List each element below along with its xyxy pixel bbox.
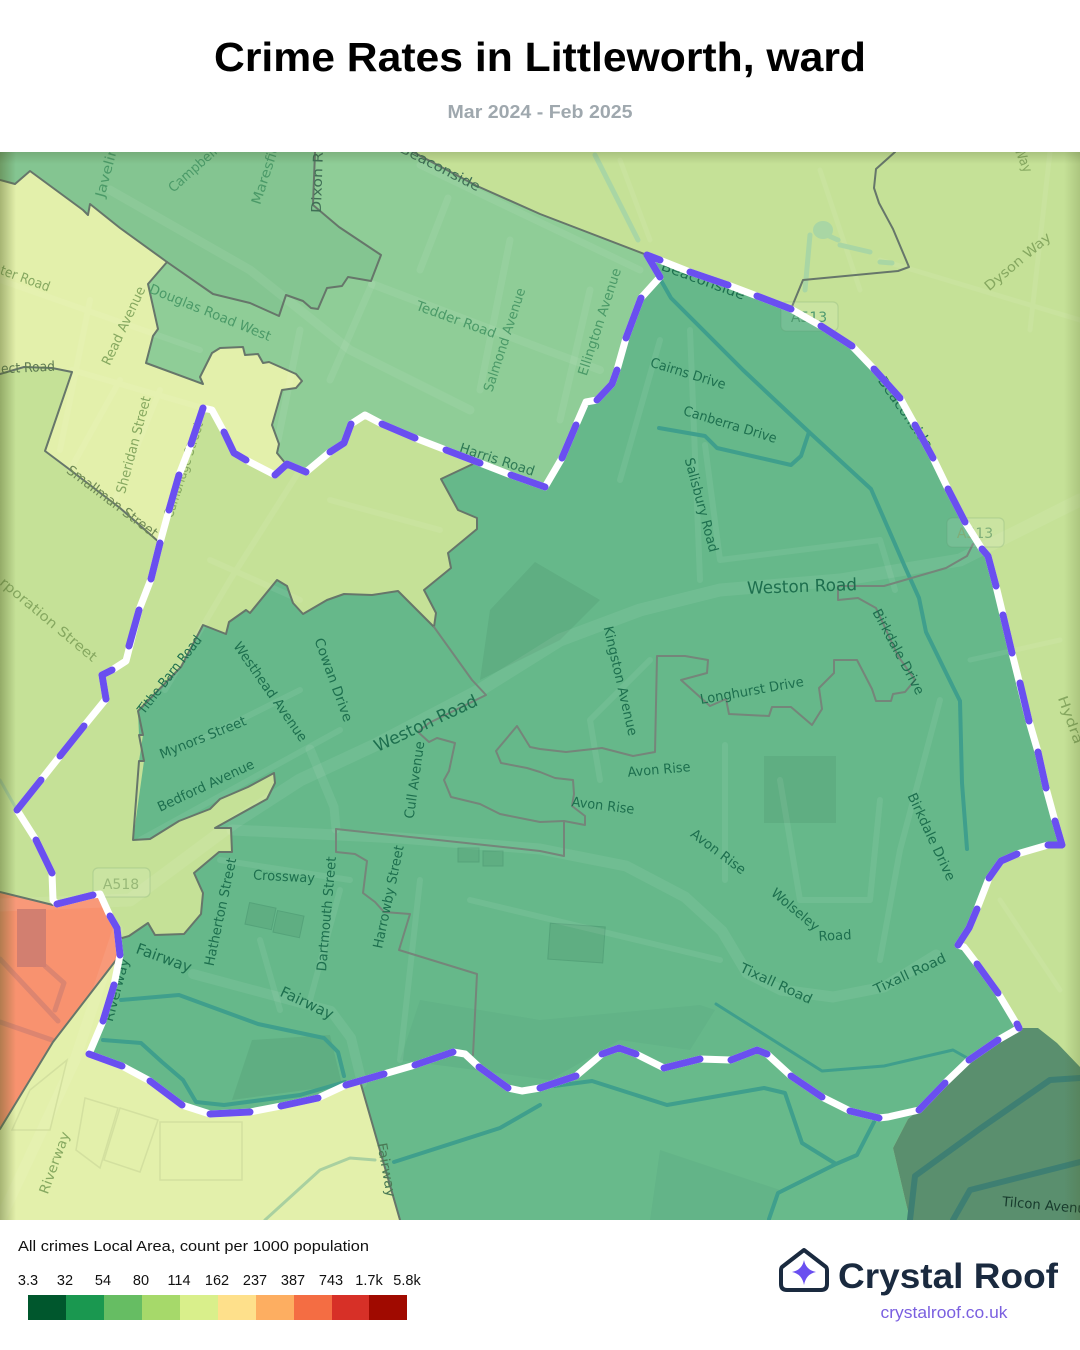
region: pale west area [0,171,302,543]
logo wordmark: Crystal Roof [838,1257,1058,1296]
ward boundary: white casing and purple dashes [17,255,1062,1118]
stream: pond channel [805,232,892,290]
legend scale numbers: 387 [281,1273,305,1289]
legend scale numbers: 5.8k [393,1273,421,1289]
legend scale numbers: 114 [167,1273,191,1289]
park patches [232,562,836,1100]
labels: ward main area: Hatherton Street [202,857,240,967]
road shield: A513 east: A513 [957,526,993,542]
icon: house with star [781,1250,827,1290]
legend title: All crimes Local Area, count per 1000 population [18,1239,369,1255]
stream: orange area rail lines [0,959,64,1040]
labels: north area: Maresfield [249,129,287,207]
SW building outlines [12,1060,242,1180]
labels: ward main area: Avon Rise [687,826,749,878]
labels: west area [0,145,1080,1196]
map background [0,152,1080,1220]
stream: Canberra branch [659,428,809,465]
labels: north area: Javelin [92,145,121,200]
road shield: A518: A518 [103,877,139,893]
labels: west area: Sheridan Street [113,395,155,495]
labels: north area: Harris Road [457,440,537,480]
labels: ward main area: Westhead Avenue [230,639,310,745]
labels: north area: Tedder Road [413,298,498,342]
road shield: A518 [93,868,150,897]
labels: ward main area: Bedford Avenue [155,757,257,815]
road shield: A513 north: A513 [791,310,827,326]
labels: ward main area: Riverway [101,957,133,1023]
labels: west area: Way [1011,145,1035,175]
region: high crime orange area [0,892,120,1129]
labels: ward main area: Weston Road [747,575,857,599]
labels: west area: Smallman Street [63,463,161,541]
region: Littleworth ward main green area [89,255,1062,1118]
stream: west channel [0,780,375,1220]
road shield: A513 east [947,518,1004,547]
labels: ward main area: Kingston Avenue [600,625,640,737]
labels: ward main area: Wolseley [768,885,822,935]
labels: west area: Dyson Way [981,230,1055,294]
labels: ward main area: Fairway [134,940,194,976]
subtitle: date range: Mar 2024 - Feb 2025 [448,101,632,122]
labels: ward main area: Birkdale Drive [904,791,958,883]
labels: ward main area: Avon Rise [627,759,691,781]
sub-area boundary lines [0,152,973,1220]
region: south-east dark area [893,1028,1080,1220]
stream: southern river [394,1081,874,1219]
legend scale numbers: 3.3 [18,1273,38,1289]
labels: ward main area: Tixall Road [736,960,815,1008]
logo url: crystalroof.co.uk [880,1304,1008,1322]
labels: west area: Cambridge Street [161,420,207,520]
labels: north area: Campbell [165,144,221,196]
legend scale numbers: 1.7k [355,1273,383,1289]
labels: north area: Dixon Ro [309,143,327,213]
labels: ward main area: Cowan Drive [310,636,356,724]
labels: ward main area: Crossway [253,867,315,887]
labels: north area: Douglas Road West [147,281,273,345]
labels: north area: Ellington Avenue [575,266,625,378]
map edge shading [0,152,1080,1220]
labels: north area [92,129,625,480]
legend scale numbers: 162 [205,1273,229,1289]
labels: ward main area: Longhurst Drive [699,674,805,708]
legend scale numbers: 54 [95,1273,111,1289]
labels: west area: ect Road [1,359,55,377]
pond [813,221,833,239]
labels: ward main area: Weston Road [371,691,481,757]
title: Crime Rates in Littleworth, ward [214,34,866,80]
labels: ward main area: Mynors Street [157,713,249,763]
stream: south-west river [103,1040,345,1105]
building block on orange area [17,909,46,967]
legend scale numbers: 743 [319,1273,343,1289]
labels: ward main area: Beaconside [874,374,936,452]
labels: ward main area: Avon Rise [571,794,635,818]
logo: Crystal Roof [781,1250,1058,1322]
stream: Fairway river [121,995,344,1076]
labels: ward main area: Birkdale Drive [869,606,927,698]
labels: ward main area: Tithe Barn Road [134,633,206,718]
labels: ward main area: Tixall Road [870,950,949,998]
legend scale numbers: 80 [133,1273,149,1289]
labels: north area: Salmond Avenue [481,286,529,394]
legend [18,1239,421,1320]
labels: ward main area: Fairway [373,1142,399,1198]
region: south green area [360,1048,919,1220]
stream: northern path [595,155,638,240]
stream: dark area channels [910,1078,1080,1220]
labels: ward main area: Salisbury Road [681,456,721,554]
labels: ward main area: Fairway [277,983,337,1023]
labels: west area: Read Avenue [99,284,149,368]
stream: Tixall channel [716,1004,969,1071]
water courses [0,155,1080,1220]
labels: ward main area: Harrowby Street [370,844,408,950]
legend scale numbers: 237 [243,1273,267,1289]
region: north-west area [0,152,381,316]
legend colour swatches [28,1295,407,1320]
roads [8,280,1008,1088]
legend scale numbers: 32 [57,1273,73,1289]
road shield: A513 north [781,302,838,331]
labels: ward main area: Cairns Drive [648,355,728,393]
labels: ward main area: Beaconside [659,258,747,304]
labels: west area: Riverway [36,1130,74,1196]
region: north area [146,152,660,487]
legend scale numbers [18,1273,421,1289]
labels: north area: Beaconside [397,141,483,195]
labels: ward main area: Canberra Drive [681,403,779,447]
region: pale south-west area [0,955,400,1220]
labels: ward main area: Road [818,927,852,945]
labels: ward main area: Dartmouth Street [314,856,340,972]
stream: north-east channel [659,277,967,849]
labels: ward main area [101,258,1080,1218]
labels: ward main area: Cull Avenue [402,740,428,820]
